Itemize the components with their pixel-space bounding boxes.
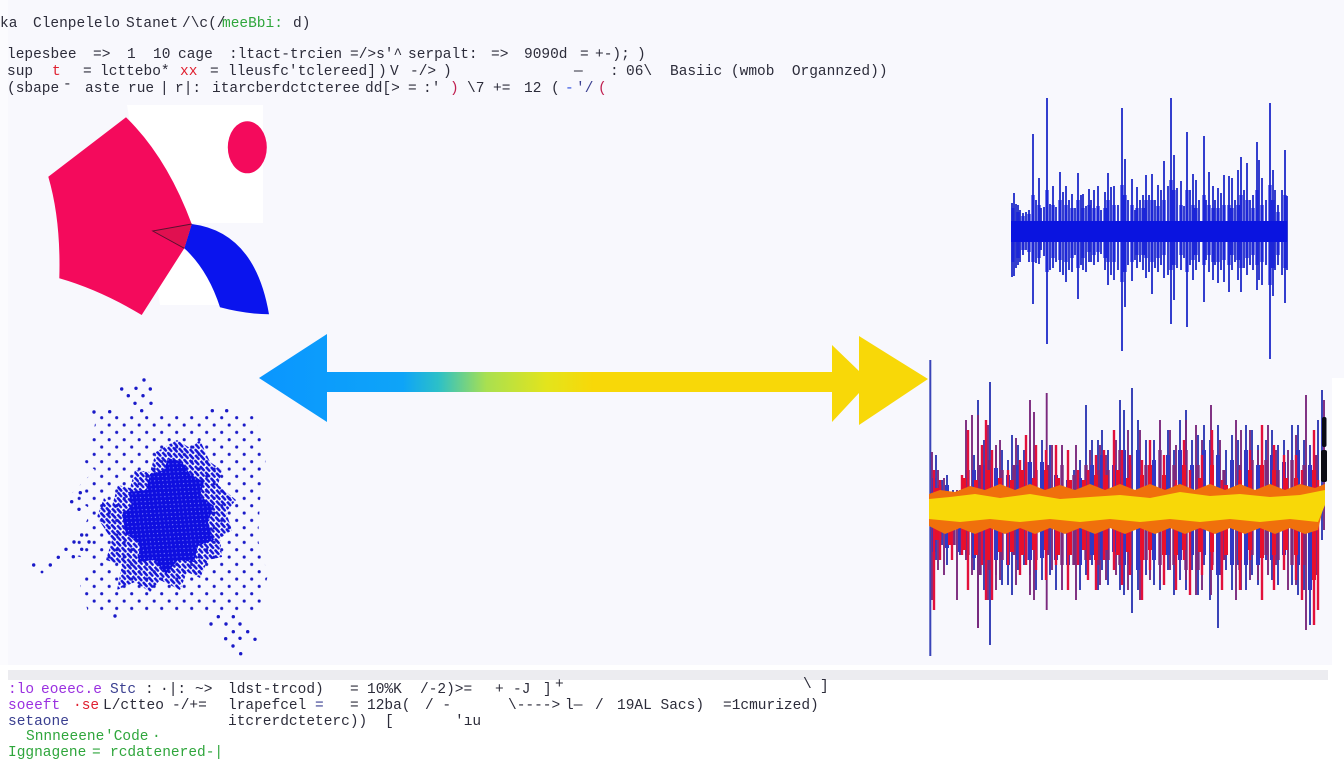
header code text: dd[> [365, 81, 400, 97]
header code text: meeBbi: [222, 16, 283, 32]
header code text [0, 16, 888, 97]
double-headed gradient arrow [259, 334, 928, 425]
header code text: - [565, 81, 574, 97]
footer code text: /-2)>= [420, 682, 472, 698]
footer code text: = [92, 745, 101, 761]
header code text: ) [637, 47, 646, 63]
header code text: :' [423, 81, 440, 97]
footer code text: [ [385, 714, 394, 730]
footer code text: = [350, 698, 359, 714]
header code text: 06\ [626, 64, 652, 80]
header code text: = [83, 64, 92, 80]
footer code text: : [145, 682, 154, 698]
header code text: /\c(/ [182, 16, 226, 32]
header code text: => [491, 47, 508, 63]
footer code text: :lo [8, 682, 34, 698]
footer code text: itcrerdcteterc)) [228, 714, 367, 730]
header code text: '/ [576, 81, 593, 97]
header code text: lcttebo* [100, 64, 170, 80]
header code text: | [160, 81, 169, 97]
header code text: ka [0, 16, 18, 32]
header code text: 9090d [524, 47, 568, 63]
footer code text: · [152, 729, 161, 745]
footer code text: rcdatenered-| [110, 745, 223, 761]
blue waveform [1011, 98, 1287, 359]
footer code text: L/ctteo [103, 698, 164, 714]
header code text: d) [293, 16, 310, 32]
footer code text: ·|: [160, 682, 186, 698]
header code text: V [390, 64, 399, 80]
footer code text: ~> [195, 682, 212, 698]
header code text: 12 [524, 81, 541, 97]
header code text: 10 [153, 47, 170, 63]
footer code text: \----> [508, 698, 560, 714]
footer code text: / - [425, 698, 451, 714]
footer code text: Iggnagene [8, 745, 86, 761]
header code text: = [580, 47, 589, 63]
footer code text: + [495, 682, 504, 698]
header code text: xx [180, 64, 198, 80]
multicolour waveform [929, 360, 1327, 656]
footer code text: =1cmurized) [723, 698, 819, 714]
footer code text: -/+= [172, 698, 207, 714]
footer code text: = [315, 698, 324, 714]
header code text: ) [450, 81, 459, 97]
footer code text: setaone [8, 714, 69, 730]
header code text: ( [551, 81, 560, 97]
header code text: 1 [127, 47, 136, 63]
header code text: -/> [410, 64, 436, 80]
footer code text: eoeec.e [41, 682, 102, 698]
header code text: Clenpelelo [33, 16, 120, 32]
footer code text: ldst-trcod) [228, 682, 324, 698]
header code text: ) [443, 64, 452, 80]
header code text: lepesbee [7, 47, 77, 63]
footer code text: ] [820, 679, 829, 695]
footer code text: 'Code [105, 729, 149, 745]
footer code text: l— [565, 698, 583, 714]
header code text: serpalt: [408, 47, 478, 63]
header code text: = [408, 81, 417, 97]
header code text: = [210, 64, 219, 80]
footer code text: -J [513, 682, 530, 698]
footer code text: 10%K [367, 682, 402, 698]
header code text: itarcberdctcteree [212, 81, 360, 97]
header code text: cage [178, 47, 213, 63]
header code text: t [52, 64, 61, 80]
scatter plot [32, 378, 275, 655]
header code text: += [493, 81, 510, 97]
footer code text: 12ba( [367, 698, 411, 714]
header code text: ( [598, 81, 607, 97]
header code text: : [610, 64, 619, 80]
footer code text [8, 677, 829, 761]
header code text: Stanet [126, 16, 178, 32]
header code text: (sbape [7, 81, 59, 97]
footer code text: lrapefcel [228, 698, 306, 714]
header code text: =/>s'^ [350, 47, 402, 63]
header code text: +-); [595, 47, 630, 63]
header code text: ) [378, 64, 387, 80]
footer code text: ·se [73, 698, 99, 714]
header code text: Basiic (wmob Organnzed)) [670, 64, 888, 80]
header code text: — [573, 64, 583, 80]
footer code text: + [555, 677, 564, 693]
header code text: aste [85, 81, 120, 97]
footer code text: soeeft [8, 698, 60, 714]
header code text: :ltact-trcien [229, 47, 342, 63]
header code text: \7 [467, 81, 484, 97]
header code text: r|: [175, 81, 201, 97]
footer code text: \ [803, 677, 812, 693]
footer code text: Snnneeene [26, 729, 104, 745]
header code text: - [63, 77, 72, 93]
footer code text: / [595, 698, 604, 714]
header code text: => [93, 47, 110, 63]
footer code text: ] [543, 682, 552, 698]
header code text: sup [7, 64, 33, 80]
icon: red pentagon, blue arc and circle [48, 105, 269, 315]
footer code text: 19AL Sacs) [617, 698, 704, 714]
footer code text: Stc [110, 682, 136, 698]
header code text: rue [128, 81, 154, 97]
header code text: lleusfc'tclereed] [228, 64, 376, 80]
footer code text: 'ıu [455, 714, 481, 730]
footer code text: = [350, 682, 359, 698]
